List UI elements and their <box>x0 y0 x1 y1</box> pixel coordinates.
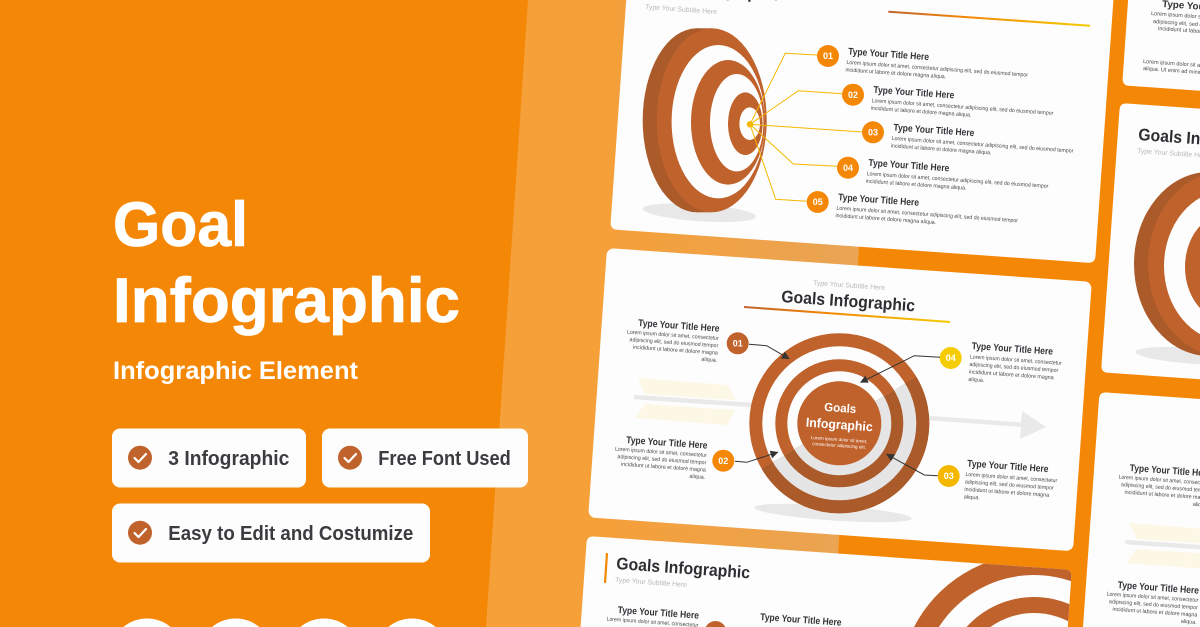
arrow shaft <box>1126 542 1200 550</box>
item 01: Type Your Title Here <box>638 318 720 335</box>
icon: 3D target <box>1134 172 1200 356</box>
lighter diagonal band <box>486 0 876 627</box>
target shadow <box>642 200 756 225</box>
arrow shaft and head <box>634 397 1046 439</box>
item 01: incididunt ut labore et dolore magna <box>633 345 719 357</box>
panel: slide 5 partial 3D target <box>1101 103 1200 379</box>
item 03: Lorem ipsum dolor sit amet, consectetur adipiscing elit, sed do eiusmod tempor <box>892 136 1074 155</box>
item 03: adipiscing elit, sed do eiusmod tempor <box>965 479 1054 492</box>
target centre dot <box>747 121 753 128</box>
item 01: incididunt ut labore et dolore magna aliqua. <box>845 67 947 80</box>
item lower: incididunt ut labore et dolore magna <box>1112 607 1198 619</box>
item 04 <box>861 341 1063 389</box>
item 01: aliqua. <box>701 357 718 364</box>
item upper <box>1117 462 1200 509</box>
target centre text: consectetur adipiscing elit. <box>812 441 866 450</box>
headline: Goal <box>113 190 248 260</box>
item 04: 04 <box>946 353 956 363</box>
arrow fletching <box>635 378 735 425</box>
panel: slide 4 partial at top right <box>1123 0 1200 91</box>
target shadow <box>1135 344 1200 368</box>
item 04: Lorem ipsum dolor sit amet, consectetur adipiscing elit, sed do eiusmod tempor <box>867 171 1049 190</box>
item 03: Type Your Title Here <box>967 459 1049 475</box>
item 02: Type Your Title Here <box>873 85 955 101</box>
accent bar <box>605 553 607 583</box>
item lower <box>1105 579 1200 626</box>
icon: check <box>128 521 152 545</box>
item 03: Type Your Title Here <box>893 123 975 139</box>
subheading: Infographic Element <box>113 357 359 385</box>
item 03: 03 <box>868 128 878 138</box>
item 01 <box>625 317 789 364</box>
item left <box>606 604 725 627</box>
feature chip: Easy to Edit and Costumize: Easy to Edit and Costumize <box>168 523 413 545</box>
item 04: incididunt ut labore et dolore magna aliqua. <box>865 179 967 192</box>
item 02: Lorem ipsum dolor sit amet, consectetur <box>615 447 707 459</box>
icon: check <box>128 446 152 470</box>
item 01: adipiscing elit, sed do eiusmod tempor <box>629 337 719 349</box>
item 02 <box>842 84 1055 124</box>
feature chip: 3 Infographic <box>112 428 306 488</box>
feature chip: Free Font Used <box>322 428 528 488</box>
slide 3 subtitle: Type Your Subtitle Here <box>615 577 687 589</box>
feature chip: Easy to Edit and Costumize <box>112 504 430 562</box>
item lower: aliqua. <box>1181 619 1197 626</box>
item 05: incididunt ut labore et dolore magna aliqua. <box>835 213 937 226</box>
item 01: Lorem ipsum dolor sit amet, consectetur adipiscing elit, sed do eiusmod tempor <box>846 60 1028 79</box>
item 02: 02 <box>848 90 858 100</box>
panel: slide 1 target with five items <box>611 0 1113 263</box>
item lower: adipiscing elit, sed do eiusmod tempor <box>1109 599 1198 611</box>
item 04: Lorem ipsum dolor sit amet, consectetur <box>970 354 1062 367</box>
item 02: aliqua. <box>689 474 706 481</box>
slide 1 subtitle: Type Your Subtitle Here <box>645 4 717 16</box>
item 03: incididunt ut labore et dolore magna <box>964 487 1050 499</box>
item 01: 01 <box>733 338 743 348</box>
item 01 <box>817 45 1029 86</box>
item 04: aliqua. <box>968 377 985 384</box>
item 03: Lorem ipsum dolor sit amet, consectetur <box>965 472 1058 484</box>
item 02: 02 <box>718 456 728 466</box>
item 04: 04 <box>843 163 853 173</box>
headline <box>113 190 460 336</box>
item 03 <box>862 121 1075 162</box>
item 04: Type Your Title Here <box>971 341 1054 358</box>
item 05 <box>807 191 1019 232</box>
item 02 <box>613 434 778 481</box>
item 04: adipiscing elit, sed do eiusmod tempor <box>969 362 1059 374</box>
item 03: incididunt ut labore et dolore magna aliqua. <box>890 143 992 156</box>
icon: 3D target <box>643 28 767 212</box>
concentric target <box>749 333 929 513</box>
target centre text: Goals <box>824 400 857 416</box>
connector lines <box>750 53 862 201</box>
item 05: 05 <box>813 197 823 207</box>
panel: slide 3 partial target <box>580 536 1072 627</box>
item 02: Type Your Title Here <box>626 435 708 452</box>
item 03 <box>887 454 1058 507</box>
item 04: incididunt ut labore et dolore magna <box>969 369 1055 381</box>
target shadow <box>754 500 912 526</box>
panel: slide 6 partial arrow and text <box>1083 392 1200 627</box>
target centre text <box>805 400 873 450</box>
item 01: 01 <box>823 51 833 61</box>
item 03: 03 <box>944 471 954 481</box>
slide 4 text <box>1143 0 1200 78</box>
slide 1 gradient rule <box>888 12 1090 26</box>
item 02: incididunt ut labore et dolore magna aliqua. <box>870 106 972 119</box>
headline: Infographic <box>113 266 460 336</box>
arrow fletching <box>1126 523 1200 570</box>
partial target rings <box>914 564 1072 627</box>
slide 2 subtitle: Type Your Subtitle Here <box>813 280 885 292</box>
icon: check <box>338 446 362 470</box>
panel: slide 2 concentric target with four items <box>588 248 1092 551</box>
slide 2 gradient rule <box>744 307 950 322</box>
target centre text: Infographic <box>805 415 873 434</box>
item left: Type Your Title Here <box>617 605 700 622</box>
feature chip: 3 Infographic: 3 Infographic <box>168 448 289 470</box>
item 05: Lorem ipsum dolor sit amet, consectetur adipiscing elit, sed do eiusmod tempor <box>836 206 1018 224</box>
item 01: Lorem ipsum dolor sit amet, consectetur <box>627 330 719 342</box>
item 04 <box>837 157 1050 197</box>
slide 2 title: Goals Infographic <box>781 287 916 315</box>
feature chip: Free Font Used: Free Font Used <box>378 448 511 470</box>
item 05: Type Your Title Here <box>838 192 920 209</box>
item 02: Lorem ipsum dolor sit amet, consectetur adipiscing elit, sed do eiusmod tempor <box>872 98 1054 117</box>
target centre text: Lorem ipsum dolor sit amet, <box>811 435 868 444</box>
item 02: adipiscing elit, sed do eiusmod tempor <box>617 454 707 466</box>
slide 3 title: Goals Infographic <box>616 554 751 582</box>
item 03: aliqua. <box>964 494 980 501</box>
item 01: Type Your Title Here <box>848 47 930 63</box>
item 04: Type Your Title Here <box>868 158 950 174</box>
bottom white circles <box>123 618 436 627</box>
item 02: incididunt ut labore et dolore magna <box>621 462 707 474</box>
